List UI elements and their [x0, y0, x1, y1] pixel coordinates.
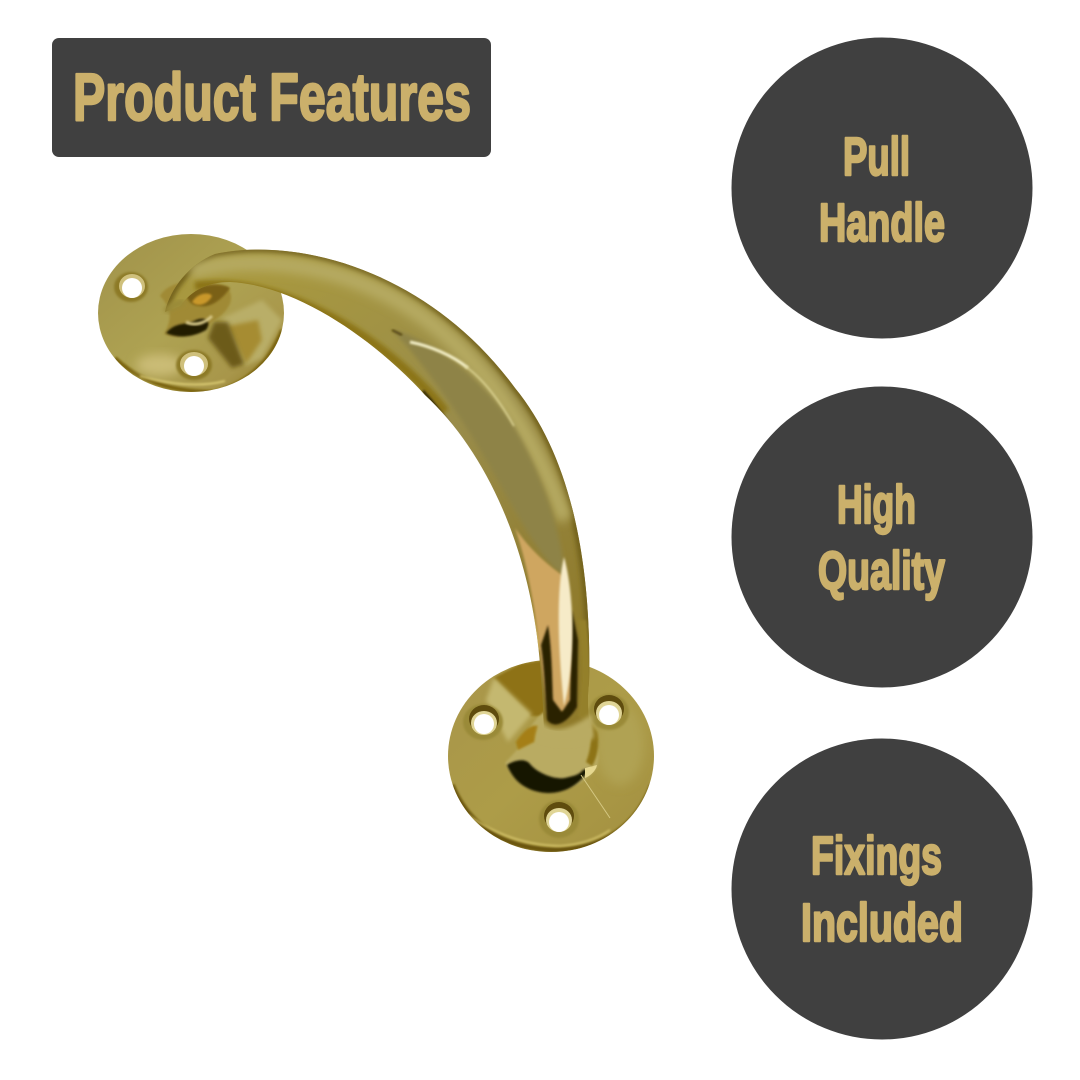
right mounting plate: [448, 660, 654, 852]
feature badge: pull handle: Pull: [843, 127, 910, 187]
brass pull handle product image: [98, 234, 654, 852]
curved handle arm: [165, 250, 594, 744]
feature badge: fixings included: [732, 738, 1032, 1040]
title banner: [52, 38, 491, 157]
feature badge: pull handle: Handle: [819, 193, 945, 253]
feature badge: high quality: [732, 386, 1032, 688]
right plate screw holes: [463, 694, 629, 838]
feature badge: pull handle: [732, 38, 1032, 338]
feature badge: fixings included: Included: [801, 893, 963, 953]
feature badge: high quality: Quality: [818, 541, 945, 601]
feature badge: fixings included: Fixings: [811, 826, 942, 886]
left mounting plate: [98, 234, 284, 392]
feature badge: high quality: High: [837, 475, 916, 535]
title banner: Product Features: [73, 60, 471, 135]
left plate screw holes: [114, 272, 212, 380]
